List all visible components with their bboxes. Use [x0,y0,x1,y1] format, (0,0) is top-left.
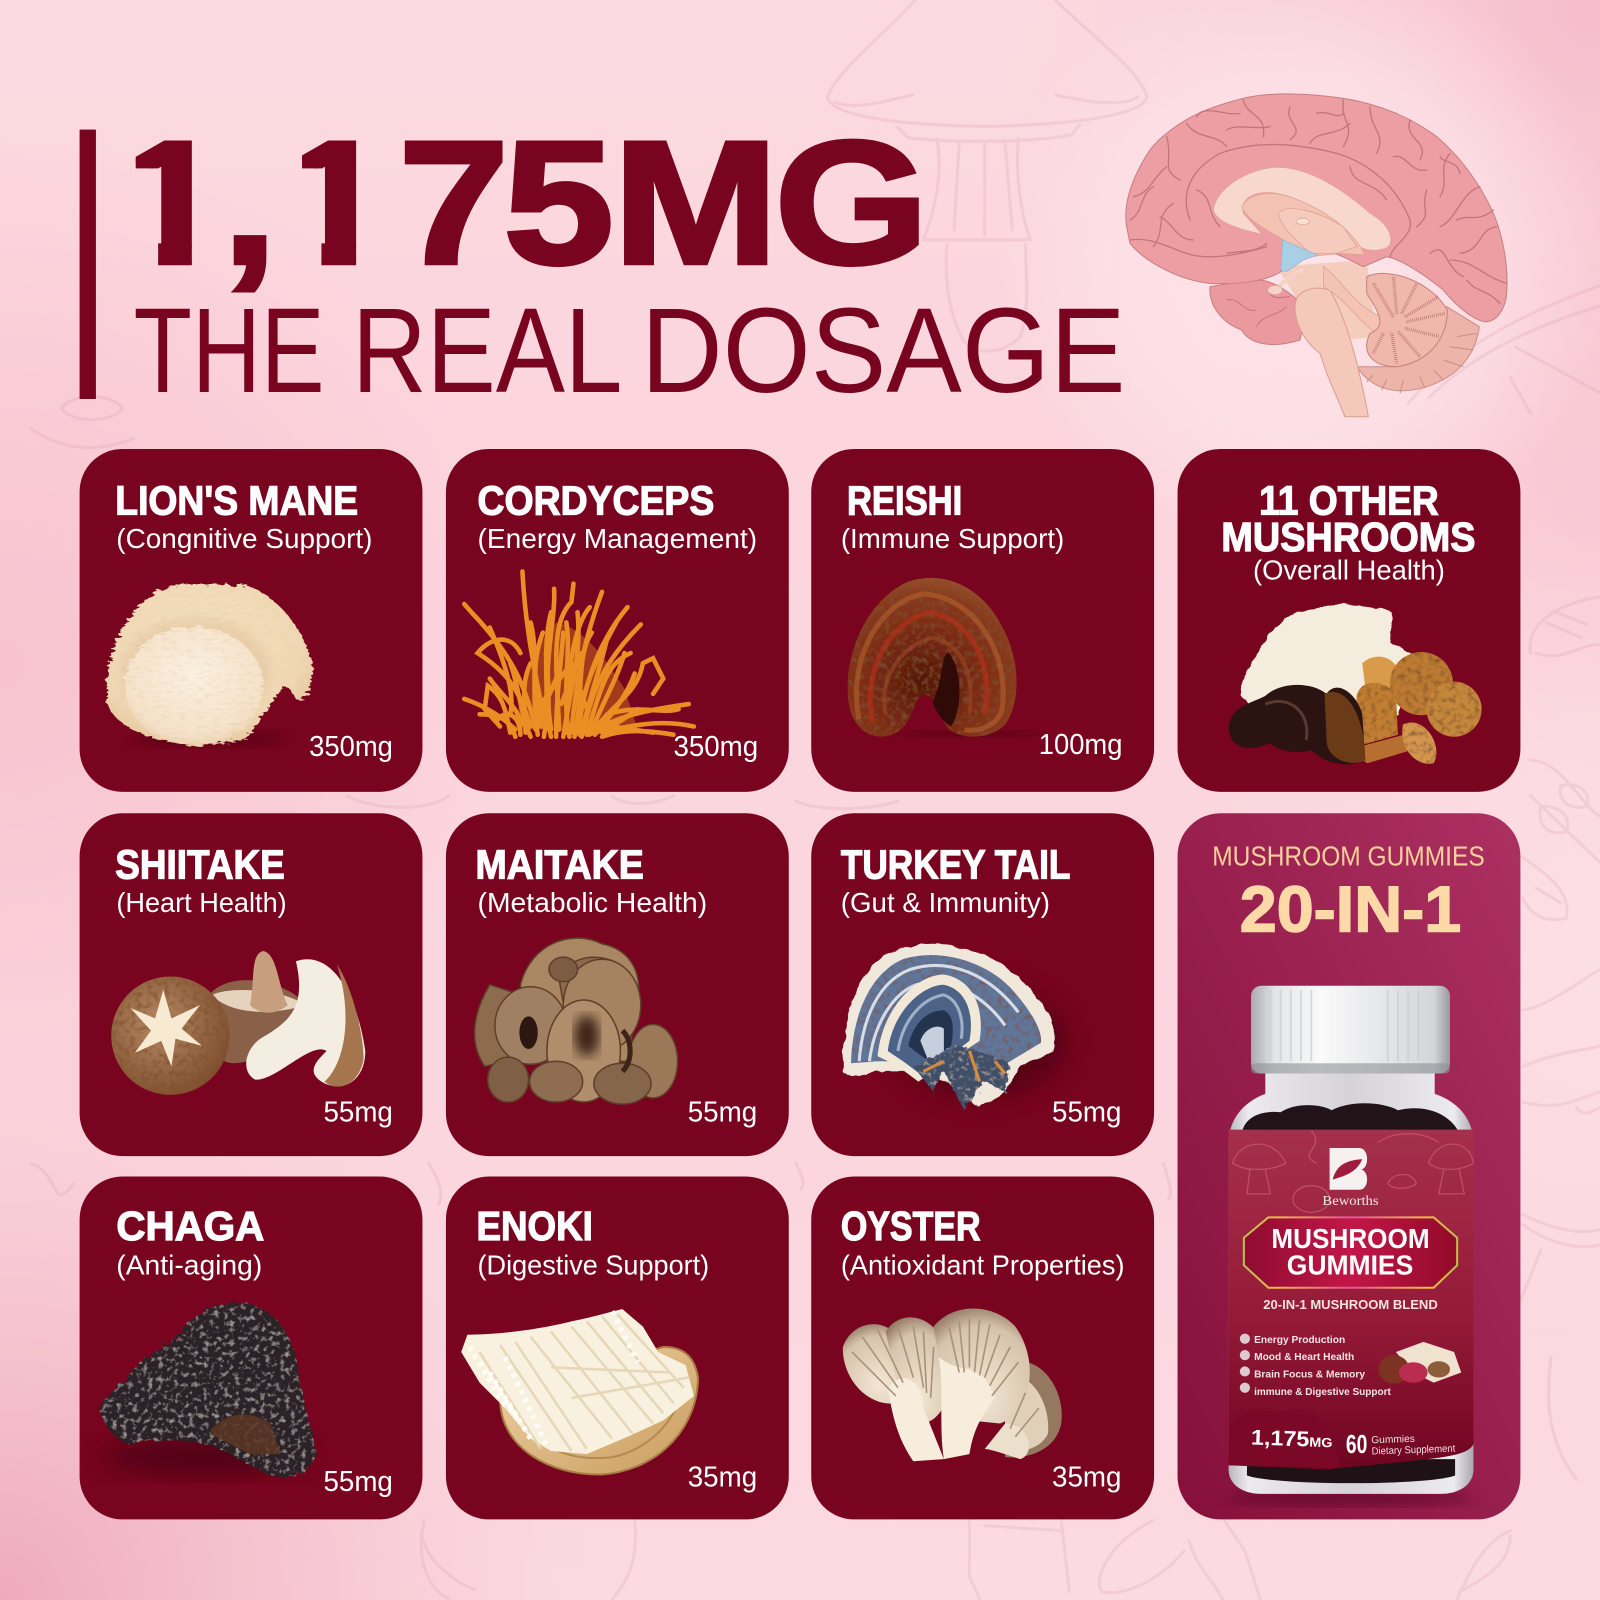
panel: chaga [80,1177,422,1519]
benefits list: Brain Focus & Memory [1254,1370,1365,1381]
benefit: (Anti-aging) [116,1249,262,1280]
panel: maitake [446,813,789,1156]
benefit: (Immune Support) [841,523,1064,554]
panel: cordyceps [446,449,789,792]
icon: shiitake mushrooms [111,951,365,1095]
benefit: (Overall Health) [1253,555,1445,586]
label line art [1233,1131,1473,1212]
panel: enoki [446,1177,789,1519]
subtitle: the real dosage: THE [134,283,324,418]
name: TURKEY TAIL [841,842,1070,888]
banner line 1: MUSHROOM [1271,1223,1430,1254]
dosage: 55mg [1052,1096,1121,1128]
icon: reishi mushroom [848,578,1041,737]
name: OYSTER [841,1203,981,1249]
illustration: brain [1126,94,1507,417]
count label: Gummies [1371,1434,1415,1446]
dosage: 55mg [323,1466,393,1498]
name: 11 OTHER [1259,477,1439,523]
benefits list [1240,1334,1391,1398]
benefit: (Metabolic Health) [478,887,707,918]
icon: oyster mushrooms [843,1309,1062,1461]
icon: turkey tail mushroom [843,944,1066,1110]
blend line: 20-IN-1 MUSHROOM BLEND [1263,1297,1438,1312]
benefits list: Mood & Heart Health [1254,1352,1354,1363]
label ingredient photo [1379,1342,1461,1384]
title block [80,104,1126,418]
name line 2: MUSHROOMS [1221,514,1476,560]
name: ENOKI [477,1203,593,1249]
benefit: (Congnitive Support) [116,523,372,554]
logo [1322,1148,1379,1208]
product count: 20-IN-1 [1240,873,1461,946]
dose text: 1,175 MG [1251,1426,1333,1452]
title accent bar [80,130,96,399]
panel: reishi [811,449,1154,792]
icon: maitake mushroom [475,938,678,1104]
panel: turkey tail [811,813,1154,1156]
benefit: (Digestive Support) [478,1249,709,1280]
benefit: (Heart Health) [116,887,287,918]
product heading: MUSHROOM GUMMIES [1212,840,1485,871]
count label: Dietary Supplement [1371,1444,1456,1458]
subtitle: the real dosage: DOSAGE [641,283,1126,418]
benefit: (Antioxidant Properties) [841,1249,1124,1280]
dosage: 55mg [688,1096,757,1128]
title: 1,175MG: 1,175MG [117,104,929,301]
name: MAITAKE [476,842,644,888]
count label [1371,1432,1456,1458]
gummy count: 60 [1346,1431,1367,1459]
cap [1251,986,1450,1073]
icon: mixed mushrooms [1229,605,1482,764]
name: REISHI [847,477,962,523]
name: CHAGA [116,1203,264,1249]
panel: shiitake [80,813,422,1156]
gummies [1242,1103,1459,1133]
label dose badge [1229,1410,1339,1467]
panel: lion's mane [80,449,422,792]
icon: lion's mane mushroom [106,583,313,747]
dosage: 55mg [323,1096,393,1128]
benefit: (Gut & Immunity) [841,887,1050,918]
name: SHIITAKE [115,842,285,888]
name: LION'S MANE [115,477,358,523]
panel: oyster [811,1177,1154,1519]
benefit: (Energy Management) [478,523,757,554]
icon: supplement bottle [1228,986,1473,1506]
bottle glass [1229,1071,1473,1494]
dosage: 100mg [1039,729,1122,761]
benefits list: Energy Production [1254,1335,1345,1346]
panel: 11 other mushrooms [1178,449,1520,792]
dosage: 35mg [1052,1462,1121,1494]
subtitle: the real dosage: REAL [352,283,622,418]
panel: product [1178,813,1520,1519]
dosage: 35mg [688,1462,757,1494]
benefits list: immune & Digestive Support [1254,1387,1391,1398]
icon: enoki mushrooms [461,1309,698,1475]
icon: chaga mushroom [99,1303,316,1477]
logo: Beworths [1322,1193,1379,1208]
dosage: 350mg [309,731,393,763]
dosage: 350mg [673,731,758,763]
label banner [1244,1217,1457,1288]
icon: cordyceps [464,571,694,737]
banner line 2: GUMMIES [1287,1249,1413,1280]
name: CORDYCEPS [478,477,714,523]
label [1229,1130,1473,1469]
